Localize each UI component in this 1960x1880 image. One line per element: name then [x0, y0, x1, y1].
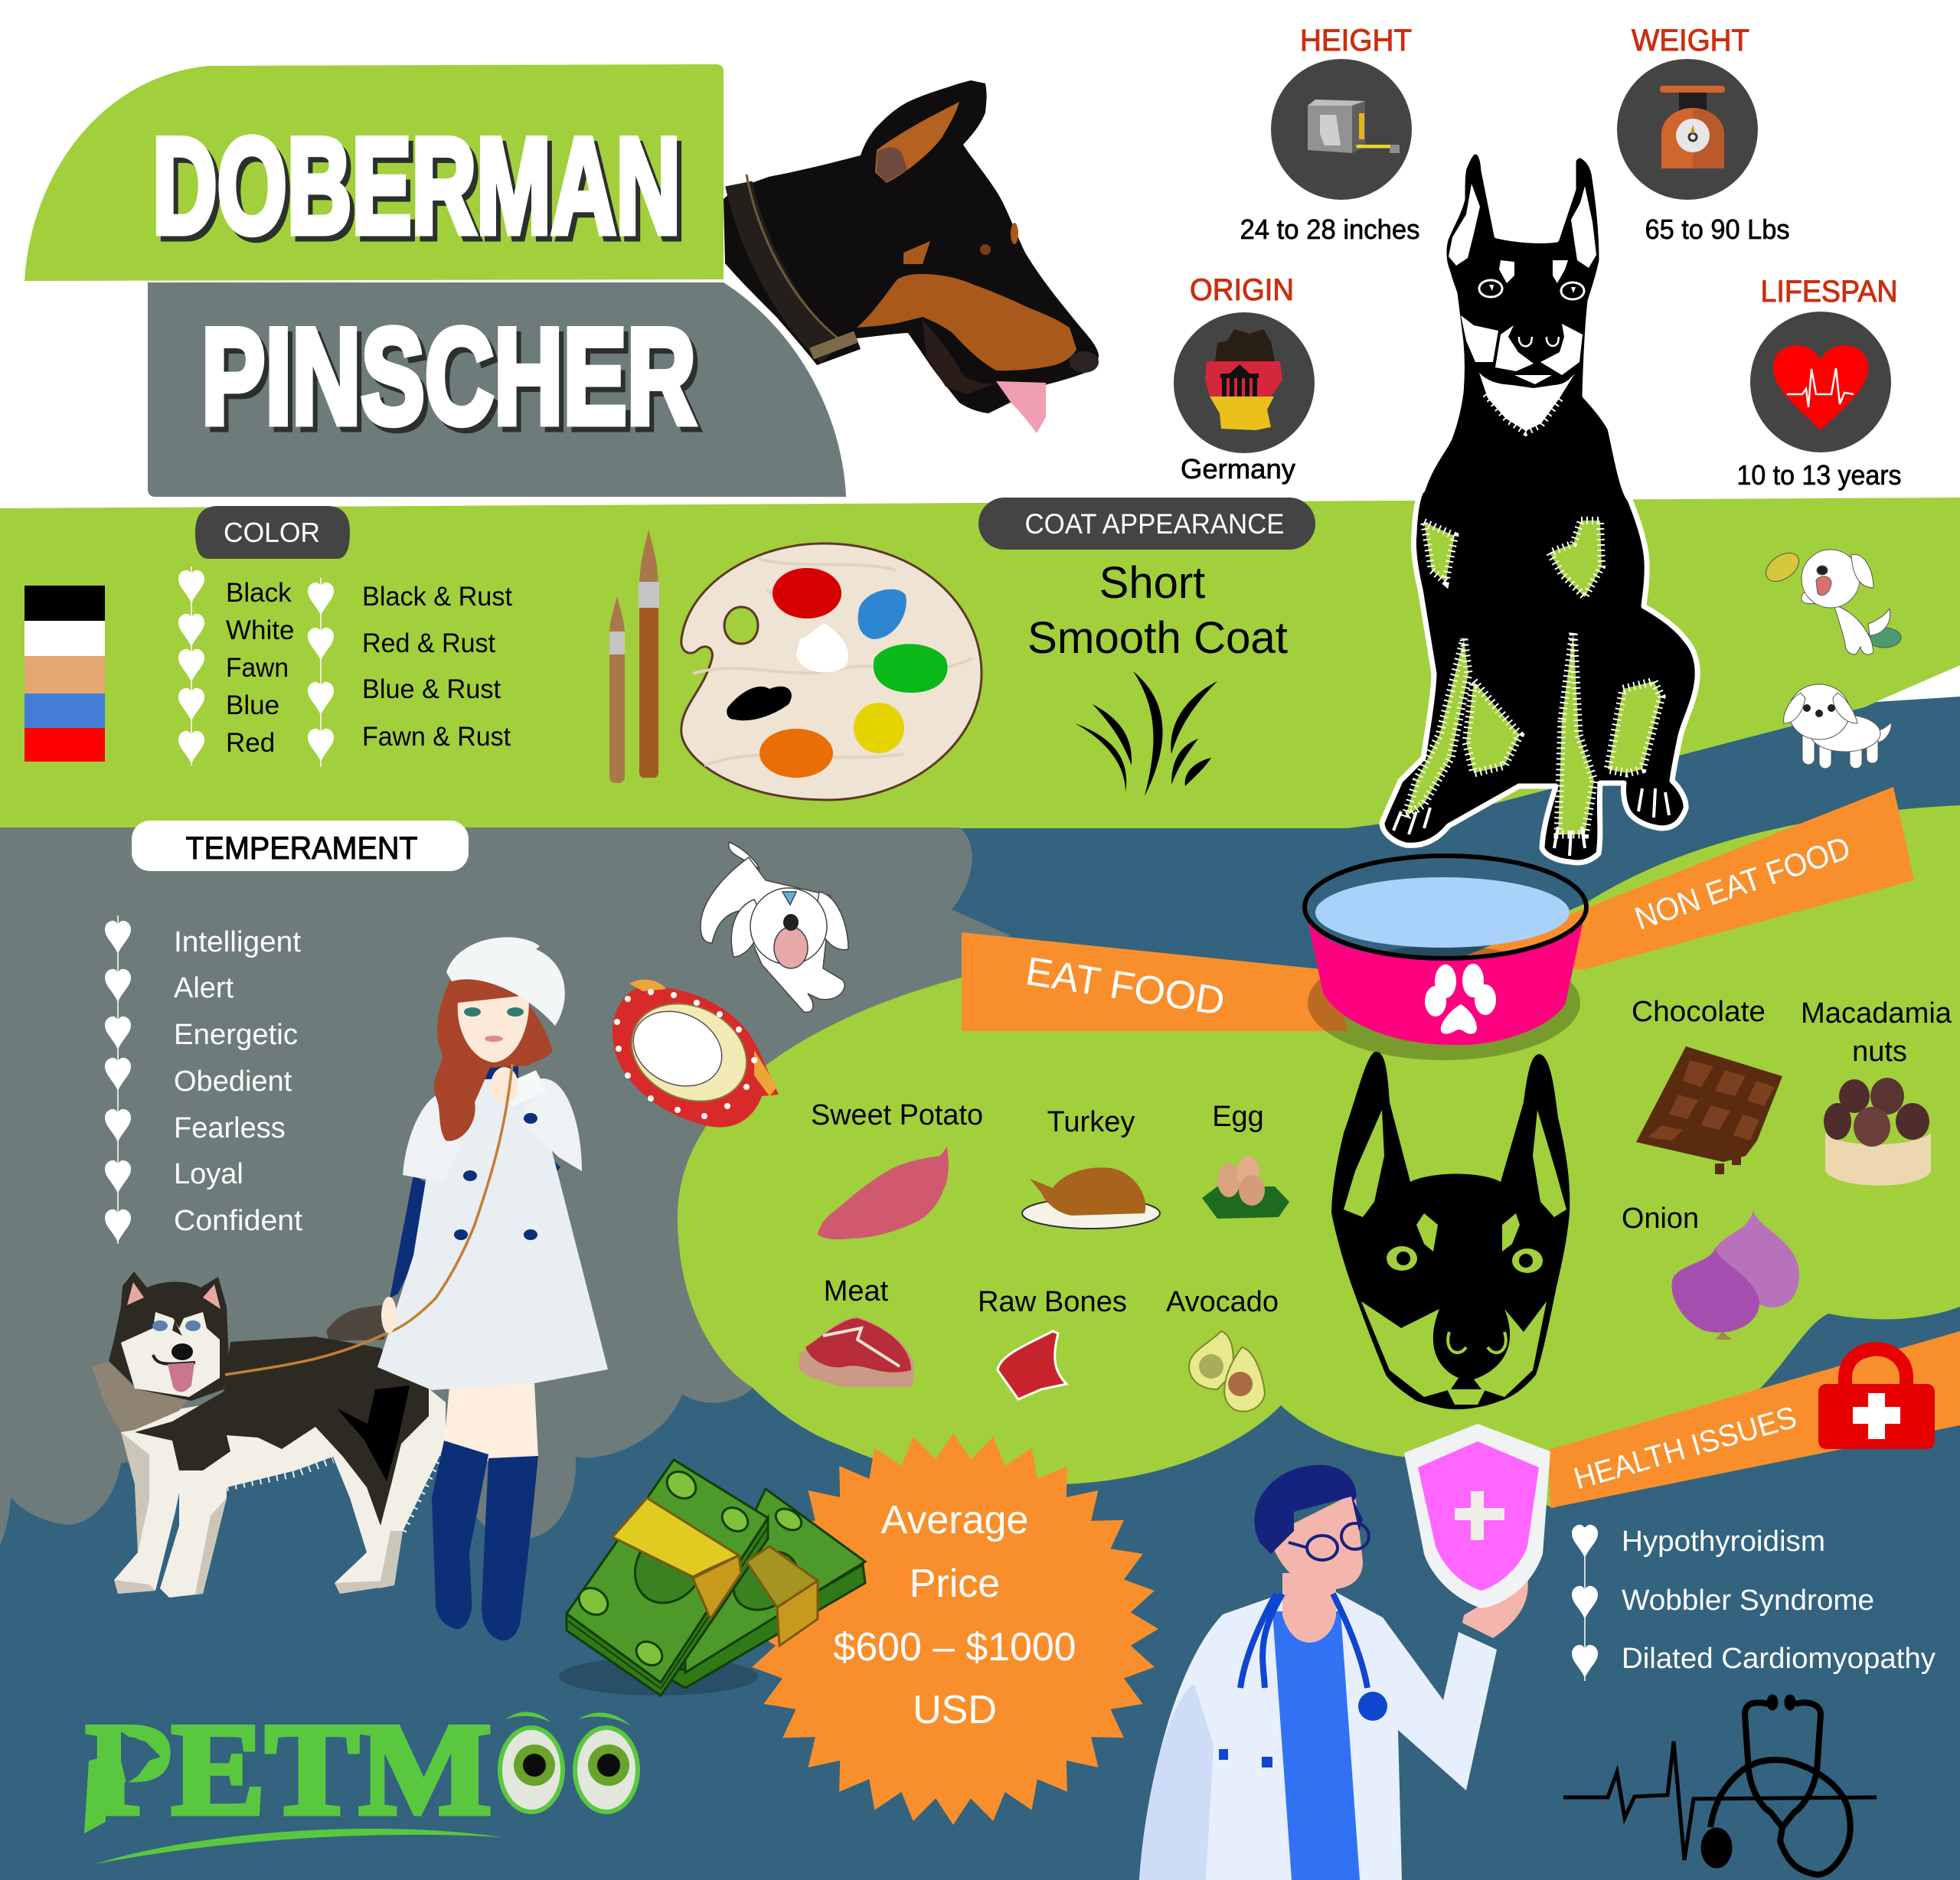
stethoscope head	[1358, 1692, 1387, 1721]
leg fur	[1405, 632, 1661, 834]
ruff tan	[92, 1361, 189, 1432]
basket polka dots	[614, 989, 757, 1119]
stat: lifespan	[1736, 275, 1902, 491]
icon: tape measure	[1271, 59, 1412, 200]
nose	[783, 914, 799, 931]
tail	[326, 1304, 387, 1341]
logo swoosh	[96, 1829, 501, 1864]
price text: Average	[881, 1498, 1028, 1542]
logo P notch	[84, 1757, 106, 1833]
ear	[1851, 554, 1873, 588]
scrubs	[1272, 1611, 1360, 1880]
green peanut toy	[1867, 628, 1901, 648]
value: Germany	[1181, 453, 1295, 485]
temperament list	[105, 916, 302, 1244]
coat	[377, 1079, 608, 1390]
panel: health list: Hypothyroidism	[1622, 1526, 1825, 1558]
coat text	[1027, 558, 1288, 663]
left stack	[567, 1460, 768, 1696]
legs	[1802, 731, 1878, 769]
heading: LIFESPAN	[1761, 275, 1897, 308]
inner ear	[877, 147, 907, 182]
food label: onion: Onion	[1622, 1203, 1699, 1235]
colour list: single	[178, 566, 294, 765]
coat text: Short	[1099, 558, 1205, 608]
tongue	[168, 1363, 194, 1392]
food: sweet potato	[818, 1147, 949, 1239]
illustration: sitting doberman	[1382, 152, 1697, 863]
colour list: rust combos: Black & Rust	[362, 582, 512, 612]
cute dog: in basket	[612, 980, 779, 1128]
food: macadamia nuts	[1824, 1078, 1931, 1186]
chest patch fur	[1424, 521, 1602, 597]
gold bands	[612, 1498, 818, 1646]
background: slate blue	[0, 658, 1960, 1880]
value: 10 to 13 years	[1736, 459, 1902, 491]
hand	[1462, 1577, 1528, 1638]
hat	[446, 937, 565, 1026]
logo P dog cutout	[121, 1731, 161, 1784]
tail	[1868, 609, 1890, 635]
arm	[1802, 589, 1834, 605]
illustration: woman with leash	[225, 937, 608, 1640]
food label: meat: Meat	[824, 1275, 889, 1307]
beard fur edge	[1485, 394, 1562, 432]
head	[1802, 550, 1860, 608]
food label: turkey: Turkey	[1047, 1106, 1135, 1138]
panel: health list: Wobbler Syndrome	[1622, 1585, 1874, 1617]
face	[458, 995, 529, 1062]
pocket buttons	[1219, 1749, 1272, 1767]
icon: medical kit	[1818, 1349, 1935, 1449]
tongue	[996, 381, 1046, 433]
nose	[172, 1343, 193, 1360]
heading: ORIGIN	[1190, 273, 1294, 307]
beard	[1479, 373, 1575, 431]
paws	[1393, 788, 1669, 856]
coat text: Smooth Coat	[1027, 613, 1288, 663]
mouth	[153, 1355, 195, 1364]
icon: shield	[1404, 1424, 1550, 1608]
stat: origin	[1174, 273, 1315, 485]
colour list: single: Black	[226, 578, 292, 608]
mouth	[923, 320, 1003, 394]
palette grain	[693, 559, 972, 765]
eyes and brows	[1387, 1213, 1543, 1273]
ear fur	[1449, 184, 1596, 268]
temperament list: Alert	[174, 972, 234, 1004]
nose	[1817, 566, 1828, 575]
food label: avocado: Avocado	[1166, 1286, 1279, 1318]
dark back	[135, 1337, 429, 1526]
title: PINSCHER: PINSCHER	[201, 300, 696, 452]
cheek fur	[1461, 315, 1583, 384]
panel: green food blob	[678, 805, 1960, 1508]
tongue	[1816, 576, 1831, 596]
colour list: single: Red	[226, 728, 275, 758]
fur edge	[227, 1444, 446, 1531]
price text: $600 – $1000	[833, 1625, 1076, 1669]
ears pink	[127, 1282, 144, 1305]
food: health issues banner: HEALTH ISSUES	[1570, 1400, 1801, 1496]
food label: egg: Egg	[1212, 1101, 1264, 1133]
hand near hem	[381, 1297, 397, 1333]
temperament list: Energetic	[174, 1019, 298, 1051]
temperament list: Confident	[174, 1205, 302, 1237]
brows and eyes	[1479, 260, 1584, 299]
grey leg shading	[114, 1432, 403, 1594]
food label: chocolate: Chocolate	[1632, 996, 1766, 1028]
sleeves	[403, 1079, 582, 1183]
food label: nuts: nuts	[1852, 1036, 1907, 1068]
price starburst	[748, 1433, 1158, 1825]
title: DOBERMAN	[152, 109, 685, 267]
hand	[491, 1067, 518, 1104]
title panel: green	[24, 64, 724, 281]
legs and belly white	[114, 1389, 446, 1598]
leash	[225, 1064, 512, 1375]
eye	[980, 244, 991, 255]
title: PINSCHER: PINSCHER	[206, 305, 701, 458]
coat tab: COAT APPEARANCE	[1024, 508, 1285, 540]
nostrils	[1519, 337, 1559, 346]
coat tab	[978, 498, 1315, 550]
temperament list: Fearless	[174, 1112, 286, 1144]
icon: paw	[1425, 964, 1496, 1034]
body	[1810, 715, 1880, 752]
food: items	[799, 996, 1952, 1412]
food: steak	[799, 1317, 914, 1387]
food: health issues banner	[1548, 1331, 1960, 1508]
colour list: rust combos	[308, 578, 512, 767]
icon: heart with ecg	[1750, 312, 1891, 452]
head gem	[782, 892, 796, 905]
collar	[739, 175, 856, 354]
title: PINSCHER	[201, 300, 701, 458]
head	[1788, 684, 1850, 739]
boots	[432, 1441, 538, 1640]
temperament pill	[132, 821, 469, 871]
colour list: single: White	[226, 615, 294, 645]
food label: macadamia: Macadamia	[1801, 997, 1952, 1030]
food: avocado	[1189, 1331, 1265, 1412]
face mask	[121, 1312, 220, 1397]
coat	[1139, 1592, 1497, 1880]
food: turkey	[1022, 1167, 1160, 1229]
illustration: husky	[92, 1271, 446, 1598]
icon: germany flag map	[1174, 312, 1315, 453]
coat buttons	[454, 1113, 537, 1240]
colour list: rust combos: Red & Rust	[362, 628, 495, 658]
value: 65 to 90 Lbs	[1645, 214, 1790, 245]
black saddle	[337, 1386, 410, 1481]
food label: raw bones: Raw Bones	[978, 1286, 1127, 1318]
chocolate grid	[1648, 1060, 1775, 1141]
title panel: grey	[148, 282, 846, 497]
temperament list: Obedient	[174, 1066, 292, 1098]
icon: money stacks	[559, 1460, 865, 1696]
nostrils	[1448, 1332, 1506, 1353]
cute dog: rolling	[701, 842, 848, 1012]
food: eat food banner	[962, 932, 1348, 1031]
stat: height	[1240, 24, 1419, 245]
colour tab: COLOR	[224, 517, 320, 548]
temperament list: Loyal	[174, 1158, 243, 1190]
food: eggs on grass	[1202, 1156, 1289, 1219]
ears	[1784, 693, 1805, 723]
panel: health list	[1572, 1525, 1936, 1681]
face	[1265, 1493, 1363, 1590]
colour list: rust combos: Blue & Rust	[362, 674, 501, 704]
temperament pill: TEMPERAMENT	[185, 830, 418, 866]
food label: sweet potato: Sweet Potato	[811, 1099, 983, 1131]
face	[1803, 704, 1835, 717]
price text: Price	[910, 1562, 1000, 1606]
shadow	[559, 1657, 758, 1696]
yellow peanut toy	[1761, 547, 1804, 587]
tail	[729, 842, 760, 869]
colour tab	[195, 506, 350, 559]
stethoscope	[1240, 1594, 1367, 1688]
logo wordmark: PETM	[86, 1697, 492, 1842]
arms navy	[390, 1051, 560, 1298]
head	[750, 888, 827, 964]
body	[1834, 605, 1873, 654]
icon: paint brushes	[609, 530, 659, 783]
cute dog: juggling	[1761, 547, 1901, 654]
white wedge	[1876, 665, 1960, 702]
ear interior	[875, 102, 959, 183]
colour list: rust combos: Fawn & Rust	[362, 722, 511, 752]
colour list: single: Blue	[226, 690, 279, 720]
panel: grey temperament cloud	[0, 827, 1010, 1545]
icon: scale	[1617, 59, 1758, 200]
panel: health list: Dilated Cardiomyopathy	[1622, 1643, 1936, 1675]
coat collar	[490, 1070, 547, 1106]
heading: WEIGHT	[1632, 24, 1749, 57]
leg fur edges	[1405, 632, 1661, 834]
food: non eat food banner	[1461, 787, 1914, 970]
food: non eat food banner: NON EAT FOOD	[1630, 829, 1854, 937]
brow	[1011, 223, 1018, 244]
price text: USD	[913, 1688, 997, 1732]
cheek highlight	[903, 241, 930, 264]
logo: petmoo	[84, 1697, 640, 1864]
coat lower shade	[1139, 1684, 1214, 1880]
neck	[1282, 1573, 1336, 1643]
illustration: doberman face	[1331, 1052, 1570, 1409]
eyes and lips	[464, 1007, 524, 1042]
eye mask	[172, 1320, 182, 1336]
title block	[24, 64, 846, 497]
price text	[833, 1498, 1076, 1732]
body	[701, 857, 844, 1012]
hair	[1254, 1465, 1363, 1554]
legs	[444, 1383, 538, 1462]
title: DOBERMAN: DOBERMAN	[157, 115, 685, 267]
food: onions	[1671, 1210, 1799, 1340]
glasses	[1289, 1523, 1369, 1560]
muzzle fur	[1361, 1301, 1547, 1405]
icon: dog bowl	[1305, 856, 1586, 1060]
title: DOBERMAN: DOBERMAN	[152, 109, 681, 262]
panel: temperament	[105, 821, 469, 1244]
cute dog: standing	[1784, 684, 1891, 769]
eyes	[152, 1320, 168, 1331]
mouth	[774, 927, 808, 968]
panel: colour	[24, 506, 982, 800]
nose	[1070, 351, 1099, 373]
heading: HEIGHT	[1300, 24, 1412, 57]
food: raw bone	[998, 1331, 1067, 1399]
ears	[731, 899, 762, 957]
head silhouette	[724, 80, 1099, 413]
icon: grass	[1075, 671, 1217, 796]
icon: paint palette	[681, 543, 982, 800]
doberman head photo	[724, 80, 1099, 433]
logo eyes	[498, 1712, 640, 1814]
panel: green band	[0, 498, 1960, 828]
hair	[434, 968, 553, 1141]
food: eat food banner: EAT FOOD	[1023, 949, 1228, 1024]
silhouette	[1382, 152, 1697, 863]
stat: weight	[1617, 24, 1790, 245]
chest patches	[1424, 521, 1602, 597]
ear fur	[1344, 1110, 1566, 1217]
colour swatches	[24, 586, 105, 762]
value: 24 to 28 inches	[1240, 214, 1419, 245]
illustration: doctor	[1139, 1465, 1528, 1880]
head dark	[109, 1271, 229, 1401]
colour list: single: Fawn	[226, 653, 289, 683]
brown muzzle	[857, 274, 1076, 370]
panel: coat appearance	[978, 498, 1315, 796]
food: chocolate	[1636, 1046, 1782, 1174]
icon: ecg stethoscope	[1563, 1695, 1877, 1875]
tail	[1874, 723, 1891, 743]
right stack	[658, 1489, 865, 1688]
temperament list: Intelligent	[174, 926, 301, 958]
